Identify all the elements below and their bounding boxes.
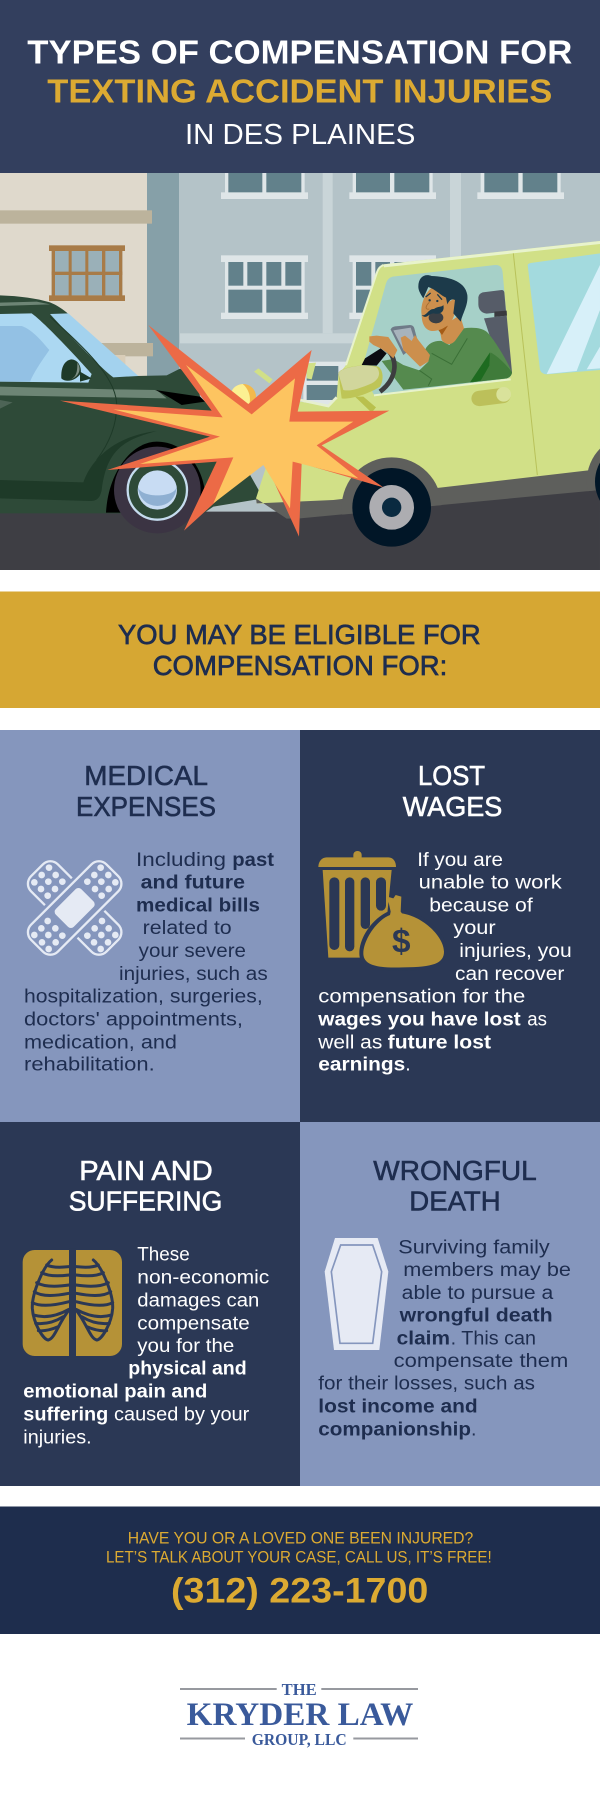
text: pain and suffering body: caused by your [114,1404,250,1426]
logo: The Kryder Law Group: THE [282,1680,317,1699]
hair [418,275,467,322]
text: pain and suffering body: physical and [128,1358,247,1380]
icon: trash can and money bag: $ [392,924,411,961]
mirror [61,359,92,382]
logo: The Kryder Law Group: KRYDER LAW [187,1697,413,1733]
icon: coffin [325,1238,388,1350]
text: pain and suffering body: compensate [137,1312,250,1334]
call to action text [106,1529,492,1566]
van wheels [352,442,600,547]
text: pain and suffering body: These [137,1244,190,1266]
heading: wrongful death: DEATH [409,1186,501,1217]
grey building [179,173,600,540]
driver window [362,265,512,395]
text: pain and suffering body: damages can [137,1290,259,1312]
wheel [114,447,201,533]
text: pain and suffering body: suffering [23,1404,108,1426]
text: lost wages body: wages you have lost [317,1008,521,1030]
text: wrongful death body: able to pursue a [402,1282,553,1304]
heading: wrongful death: WRONGFUL [373,1155,537,1186]
gold eligibility banner [0,592,600,708]
text: pain and suffering body [23,1244,270,1449]
banner heading: COMPENSATION FOR: [153,650,447,681]
text: wrongful death body: . [471,1419,476,1441]
heading: lost wages [403,760,502,822]
heading: medical expenses: MEDICAL [84,760,208,791]
panel: pain and suffering [0,1122,300,1486]
text: medical expenses body: medication, and [24,1031,177,1053]
heading: pain and suffering: SUFFERING [69,1186,222,1217]
text: wrongful death body [318,1236,571,1441]
text: lost wages body: earnings [318,1054,405,1076]
call to action text: HAVE YOU OR A LOVED ONE BEEN INJURED? [128,1529,473,1547]
icon: crossed bandages [24,857,126,959]
heading: medical expenses: EXPENSES [76,791,216,822]
text: medical expenses body: medical bills [136,894,260,916]
car seat [478,290,512,377]
text: wrongful death body: Surviving family [398,1236,550,1258]
text: medical expenses body [24,849,274,1076]
text: lost wages body [317,849,572,1076]
text: wrongful death body: compensate them [394,1350,568,1372]
text: lost wages body: compensation for the [318,986,525,1008]
text: wrongful death body: wrongful death [399,1305,553,1327]
text: lost wages body: unable to work [419,872,562,894]
panel: medical expenses [0,730,300,1122]
green car [0,295,263,533]
text: lost wages body: . [405,1054,411,1076]
call to action banner [0,1506,600,1634]
icon: rib cage [23,1248,122,1358]
mouth and moustache [429,312,443,323]
text: medical expenses body: related to [143,917,232,939]
call to action text: LET’S TALK ABOUT YOUR CASE, CALL US, IT’S FREE! [106,1548,492,1566]
heading: pain and suffering [69,1155,222,1217]
side mirror [338,365,383,413]
logo: The Kryder Law Group [180,1680,418,1749]
text: lost wages body: well as [317,1031,383,1053]
text: medical expenses body: Including [136,849,226,871]
rear window [528,253,600,374]
icon: trash can and money bag [318,851,447,971]
text: medical expenses body: rehabilitation. [24,1054,155,1076]
logo: The Kryder Law Group: GROUP, LLC [252,1730,347,1749]
phone [391,325,418,355]
phone number: (312) 223-1700 [171,1572,428,1611]
text: wrongful death body: for their losses, such as [318,1373,535,1395]
text: lost wages body: injuries, you [459,940,572,962]
text: wrongful death body: claim [397,1327,450,1349]
face [421,288,454,331]
banner heading: YOU MAY BE ELIGIBLE FOR [118,619,481,650]
heading: pain and suffering: PAIN AND [79,1155,213,1186]
text: medical expenses body: hospitalization, surgeries, [24,986,263,1008]
text: lost wages body: can recover [455,963,565,985]
front fender edge [300,397,337,406]
heading: lost wages: LOST [418,760,485,791]
road [0,489,600,570]
panel: lost wages [300,730,600,1122]
text: medical expenses body: doctors' appointments, [24,1008,243,1030]
text: wrongful death body: . This can [451,1327,536,1349]
yellow-green van [256,241,600,557]
heading: medical expenses [76,760,216,822]
text: lost wages body: because of [429,894,533,916]
title: TYPES OF COMPENSATION FOR [27,35,572,72]
door seam [513,253,537,475]
explosion burst [60,325,389,537]
title: IN DES PLAINES [185,119,415,151]
shirt [382,328,512,390]
text: pain and suffering body: you for the [137,1335,234,1357]
text: medical expenses body: past [232,849,274,871]
debris [231,368,273,409]
illustration: car crash scene [0,173,600,570]
text: pain and suffering body: injuries. [23,1427,92,1449]
header banner [0,0,600,173]
text: pain and suffering body: emotional pain and [23,1381,207,1403]
title [27,35,572,151]
text: lost wages body: as [527,1008,547,1030]
driver with seat, phone and steering wheel [362,275,512,392]
text: wrongful death body: lost income and [318,1396,478,1418]
banner heading [118,619,481,681]
text: lost wages body: your [453,917,496,939]
panel: wrongful death [300,1122,600,1486]
text: lost wages body: future lost [388,1031,492,1053]
hands [401,335,430,367]
text: wrongful death body: members may be [403,1259,571,1281]
text: wrongful death body: companionship [318,1419,471,1441]
heading: wrongful death [373,1155,537,1217]
text: medical expenses body: your severe [139,940,246,962]
text: lost wages body: If you are [417,849,503,871]
wheel arches [342,448,600,514]
cream building [0,173,179,540]
text: medical expenses body: injuries, such as [119,963,268,985]
neck [439,315,464,344]
door handle [471,387,511,407]
steering wheel [362,348,394,392]
title: TEXTING ACCIDENT INJURIES [47,74,552,111]
text: pain and suffering body: non-economic [137,1267,270,1289]
text: medical expenses body: and future [141,872,245,894]
heading: lost wages: WAGES [403,791,502,822]
